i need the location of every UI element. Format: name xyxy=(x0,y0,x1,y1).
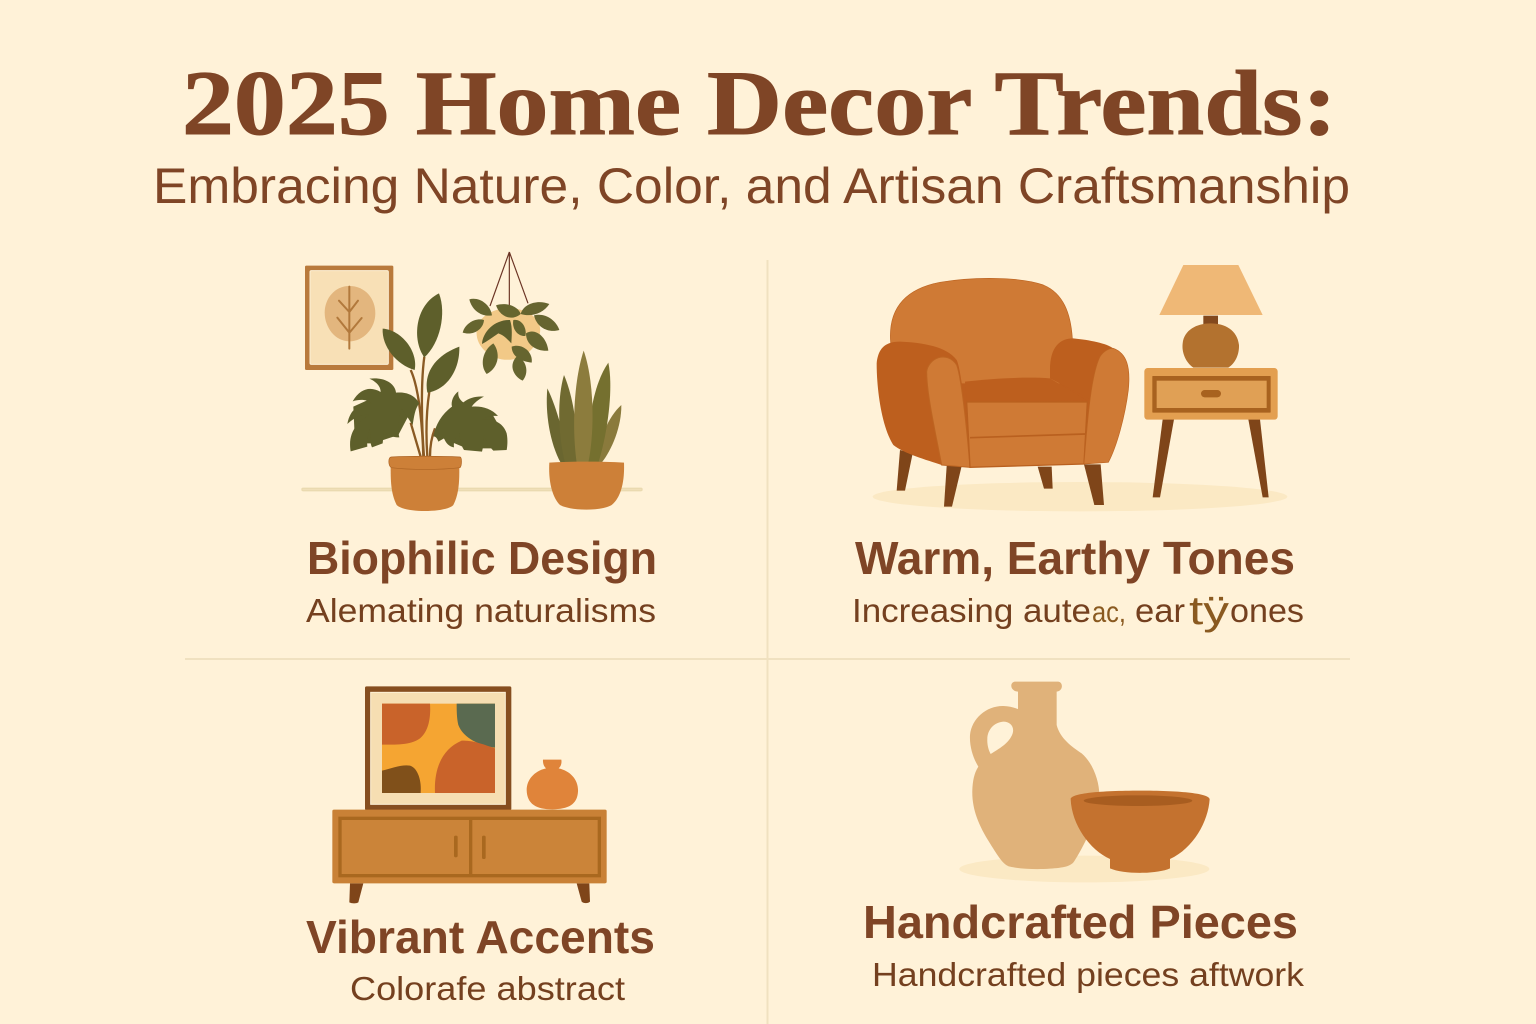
panel: biophilic design xyxy=(302,252,657,629)
description: handcrafted pieces: Handcrafted pieces aftwork xyxy=(872,956,1305,993)
heading: warm earthy tones: Warm, Earthy Tones xyxy=(855,532,1295,584)
heading: handcrafted pieces: Handcrafted Pieces xyxy=(863,896,1298,948)
description: biophilic design: Alemating naturalisms xyxy=(306,592,656,629)
description: warm earthy tones xyxy=(852,589,1304,633)
icon: abstract art on cabinet xyxy=(332,686,607,903)
description: warm earthy tones: Increasing aute xyxy=(852,592,1091,629)
icon: ceramic jug xyxy=(970,682,1099,869)
icon: table lamp xyxy=(1159,265,1263,368)
subtitle: Embracing Nature, Color, and Artisan Craftsmanship xyxy=(153,158,1350,214)
icon: orange vase xyxy=(527,760,578,809)
panel: warm earthy tones xyxy=(852,265,1304,633)
icon: wooden cabinet xyxy=(332,810,607,903)
description: vibrant accents: Colorafe abstract xyxy=(350,970,625,1007)
description: warm earthy tones: ones xyxy=(1230,592,1304,629)
icon: hanging plant xyxy=(463,252,559,381)
description: warm earthy tones: ac, xyxy=(1092,596,1126,629)
description: warm earthy tones: ear xyxy=(1135,592,1185,629)
icon: framed leaf art xyxy=(305,266,393,370)
icon: potted monstera xyxy=(347,293,507,511)
icon: armchair and side table xyxy=(873,265,1287,511)
icon: framed abstract art xyxy=(365,686,511,810)
icon: terracotta bowl xyxy=(1071,791,1210,873)
heading: vibrant accents: Vibrant Accents xyxy=(306,911,655,963)
description: warm earthy tones: tÿ xyxy=(1189,589,1229,633)
panel: handcrafted pieces xyxy=(863,682,1305,993)
icon: armchair xyxy=(877,278,1129,507)
icon: jug and bowl xyxy=(959,682,1210,882)
heading: biophilic design: Biophilic Design xyxy=(307,532,657,584)
icon: plants and framed leaf xyxy=(302,252,642,511)
title: 2025 Home Decor Trends: xyxy=(182,52,1337,154)
icon: potted snake plant xyxy=(547,351,624,510)
panel: vibrant accents xyxy=(306,686,655,1007)
icon: side table xyxy=(1144,368,1278,497)
